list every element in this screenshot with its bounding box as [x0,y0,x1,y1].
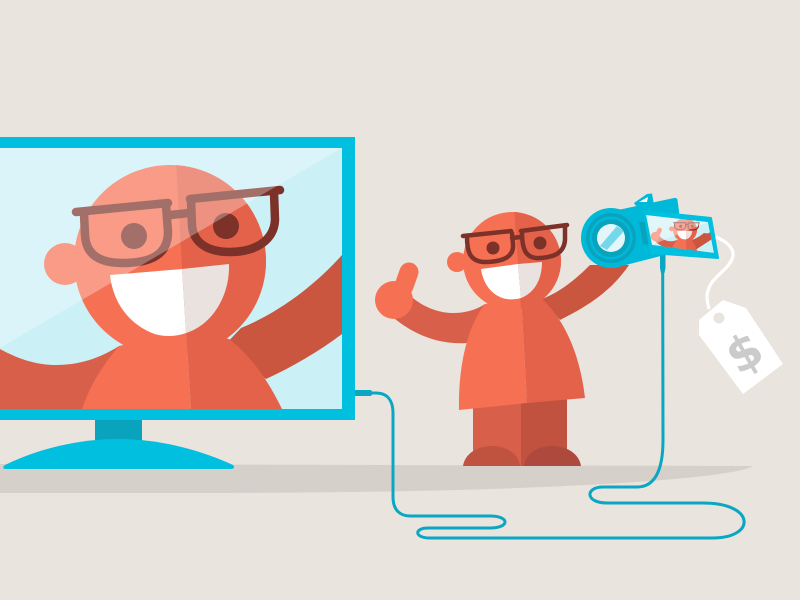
monitor [0,137,372,469]
dollar sign: $ [716,321,773,386]
feet [463,446,581,466]
camera flip screen frame [644,211,718,258]
legs [473,398,567,466]
price tag [699,300,783,394]
character glasses [76,190,280,263]
camera lens [581,208,641,268]
screen background [0,148,342,409]
monitor stand base [3,439,234,469]
monitor frame [0,137,355,420]
character: presenter [375,212,629,466]
monitor screen [0,148,342,409]
camera cable connector [660,250,666,273]
ground shadow [0,464,753,493]
monitor stand neck [95,419,142,441]
character torso left [82,345,191,409]
body, arms, head and thumbs-up hand [375,212,629,410]
camera [581,194,718,273]
camera body [595,198,684,266]
camera screen hinge [639,222,649,245]
camera screen image [646,215,714,253]
illustration [0,137,783,540]
price tag string [707,237,733,309]
character head [74,165,266,357]
screen glare [0,148,342,349]
monitor cable plug [355,390,372,396]
camera viewfinder [634,194,654,206]
character right arm on screen [220,255,342,379]
character left arm on screen [0,346,130,409]
character torso right [188,338,282,409]
character mouth [110,264,229,336]
cable: monitor to camera [372,270,744,538]
character ear [44,243,76,285]
character eyes [121,213,239,249]
